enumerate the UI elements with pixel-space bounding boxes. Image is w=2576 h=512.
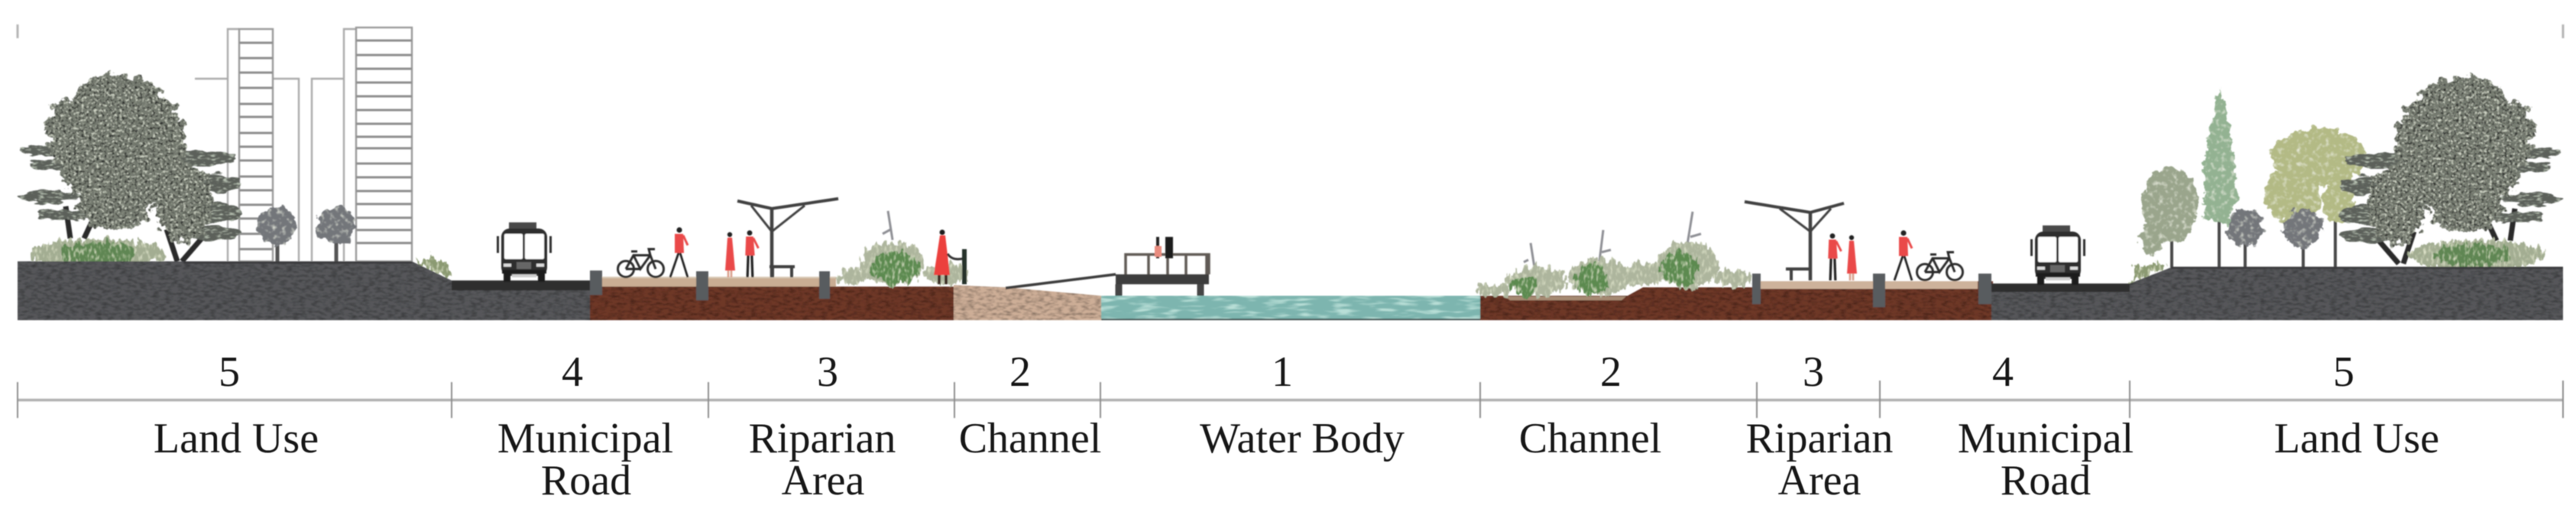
section labels: Municipal [1958,415,2134,462]
section labels: Land Use [2274,415,2439,462]
left riparian plants [837,211,967,285]
left slope grass [417,257,449,275]
section labels: Riparian [749,415,896,462]
icon: right bicycle [1917,252,1962,280]
section labels: Riparian [1746,415,1893,462]
icon: left bicycle [617,249,663,277]
right municipal road surface [1991,284,2130,292]
right slope grass [2130,261,2167,283]
section numbers: 5 [2333,348,2354,396]
section labels: Land Use [154,415,319,462]
left municipal road surface [452,280,590,290]
right kerbs [1752,274,1991,307]
left shrub at tree base [31,238,165,269]
left buildings [195,28,412,261]
icon: right bus [2030,225,2085,285]
left kerbs [590,271,830,300]
right channel plants [1477,212,1751,296]
water body [1101,296,1480,320]
right channel soil and riparian area [1480,281,1993,320]
right large tree group [2338,76,2563,264]
section labels: Area [1778,457,1862,504]
section numbers: 1 [1272,348,1293,396]
section labels: Water Body [1200,415,1405,462]
right shrub at tree base [2407,240,2545,271]
left riparian soil and walkway [590,277,954,320]
section numbers: 2 [1600,348,1622,396]
left shelter and bench [737,199,838,277]
channel sand slope [954,285,1101,320]
right pedestrians [1828,230,1912,280]
section labels: Road [2001,457,2091,504]
dimension line with section ticks [18,24,2563,418]
right shelter and bench [1745,202,1844,280]
section labels: Channel [1519,415,1661,462]
section labels: Road [541,457,631,504]
section labels [154,415,2439,504]
section numbers [219,348,2354,396]
left small grey trees [258,206,355,261]
section labels: Channel [959,415,1101,462]
section numbers: 2 [1009,348,1031,396]
right trees: birch and conifer [2140,89,2367,267]
section drawing: all ground and landscape [18,28,2563,320]
woman and rail at channel edge [934,229,964,284]
icon: left bus [497,222,552,282]
right land use ground [1991,267,2563,320]
footbridge and viewing deck [1006,237,1209,296]
section numbers: 4 [1992,348,2014,396]
section numbers: 3 [1803,348,1824,396]
section numbers: 5 [219,348,240,396]
section labels: Area [782,457,865,504]
section numbers: 3 [817,348,838,396]
section numbers: 4 [562,348,583,396]
section labels: Municipal [497,415,673,462]
left land use ground [18,261,590,320]
left pedestrians [670,227,758,277]
left large tree group [18,74,242,261]
